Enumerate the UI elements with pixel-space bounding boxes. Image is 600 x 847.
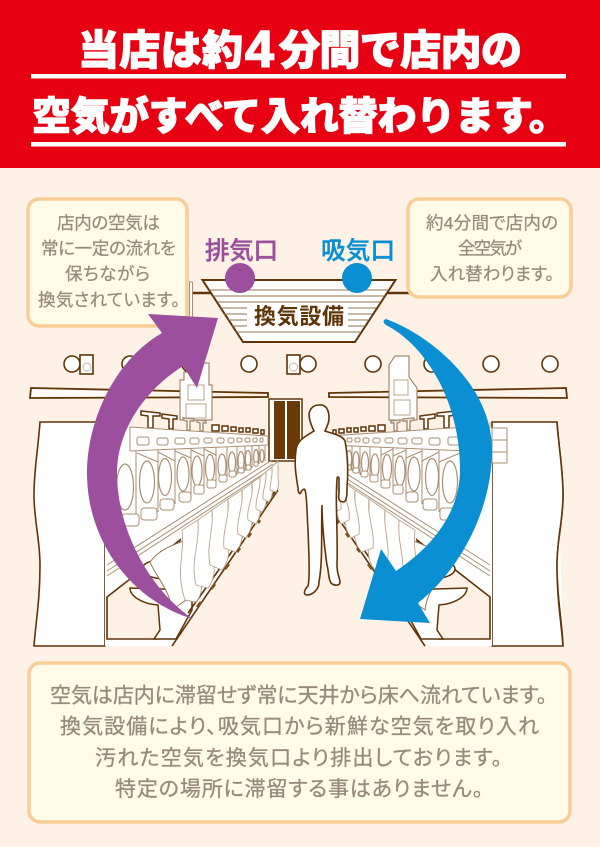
title line 1: 4 <box>245 21 274 79</box>
stools on top <box>141 411 264 434</box>
unit label: 換気設備 <box>254 304 344 329</box>
purple arrow <box>87 314 218 619</box>
floor diagonal edge <box>172 487 278 646</box>
stools at floor <box>130 538 192 639</box>
callout: right: 全空気が <box>458 238 523 258</box>
shop floor illustration <box>30 355 567 646</box>
bottom panel: 汚れた空気を換気口より排出しております。 <box>95 747 502 770</box>
cup markers <box>137 437 263 445</box>
bottom panel: 空気は店内に滞留せず常に天井から床へ流れています。 <box>50 684 547 708</box>
ventilation unit <box>190 280 410 342</box>
blue arrow <box>360 319 492 623</box>
counter rail <box>107 460 274 576</box>
callout: right: 入れ替わります。 <box>430 264 554 284</box>
title line 2: 空気がすべて入れ替わります。 <box>32 95 568 139</box>
bottom panel: 換気設備により、吸気口から新鮮な空気を取り入れ <box>60 716 539 738</box>
callout: left: 保ちながら <box>65 264 150 284</box>
mount brackets <box>190 282 410 318</box>
title line 1 <box>78 21 522 79</box>
callout: left: 店内の空気は <box>57 213 160 233</box>
machine panels <box>136 446 265 520</box>
machine trays <box>122 462 258 526</box>
top band <box>130 427 268 451</box>
title line 1: 当店は約 <box>78 28 243 74</box>
bank body <box>105 428 278 646</box>
intake dot <box>342 263 372 293</box>
person silhouette <box>295 405 348 595</box>
exhaust label: 排気口 <box>205 237 278 265</box>
bottom panel: 特定の場所に滞留する事はありません。 <box>115 778 483 801</box>
header band <box>0 0 600 168</box>
pillars <box>180 356 417 420</box>
chairs <box>180 461 278 602</box>
bottom panel <box>29 663 570 822</box>
intake label: 吸気口 <box>321 237 395 265</box>
lower cabinet <box>107 540 180 639</box>
left machine bank and wall <box>34 411 278 646</box>
right side column box <box>492 428 507 463</box>
callout: right <box>408 199 571 297</box>
title line 1: 分間で店内の <box>279 28 522 74</box>
machine windows <box>116 450 264 510</box>
wall <box>34 422 105 646</box>
chair bases <box>196 519 261 608</box>
ceiling beam <box>30 388 567 398</box>
vent slats <box>209 290 389 332</box>
back door <box>269 399 302 461</box>
callout: left: 換気されています。 <box>38 290 180 310</box>
exhaust dot <box>225 263 255 293</box>
right machine bank and wall <box>318 411 563 646</box>
callout: left <box>28 199 187 326</box>
callout: left: 常に一定の流れを <box>41 238 176 258</box>
callout: right: 約4分間で店内の <box>426 213 558 233</box>
ceiling lamps <box>64 355 558 374</box>
right wall outer edge <box>557 422 563 646</box>
